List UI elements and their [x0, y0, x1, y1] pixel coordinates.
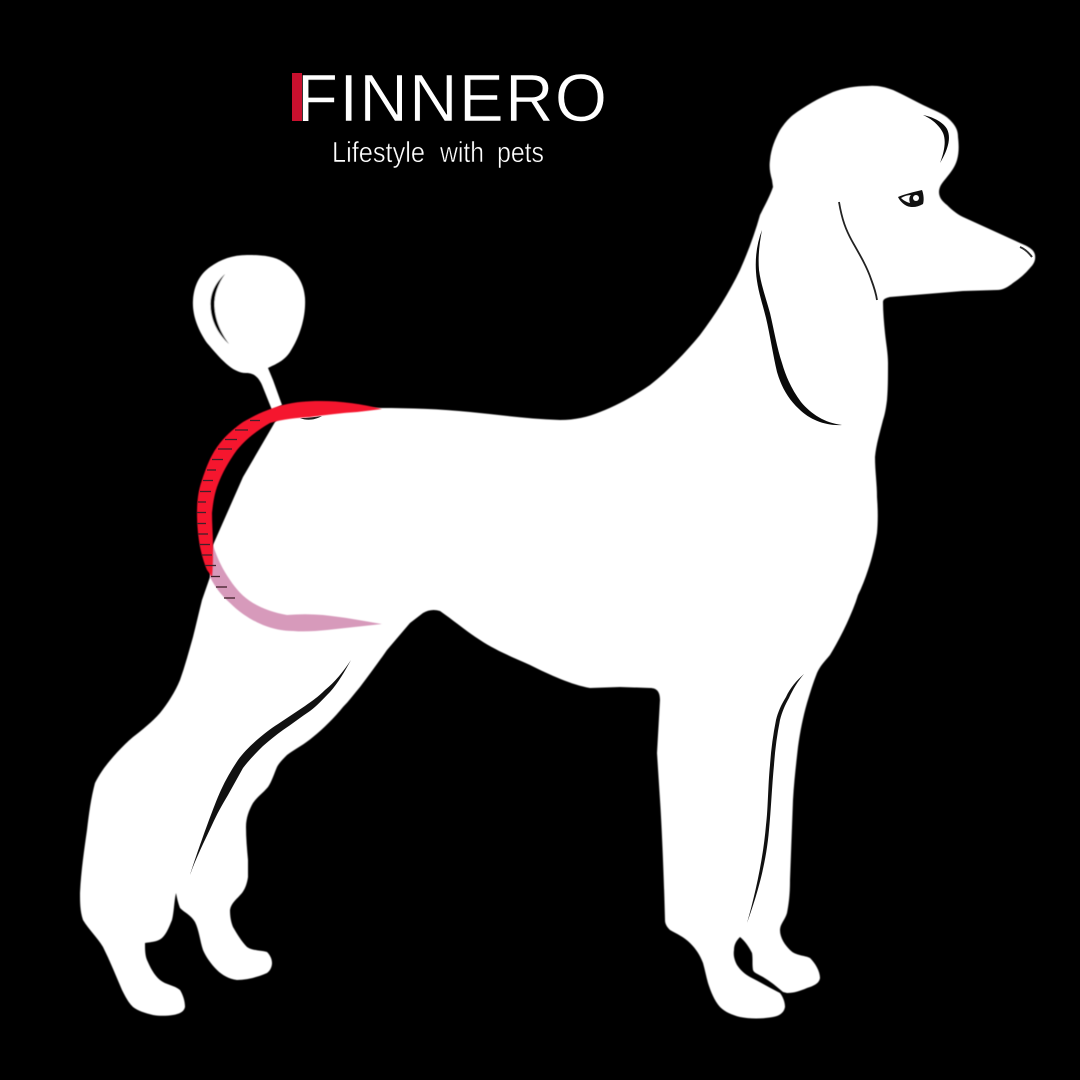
logo tagline: with — [439, 137, 484, 169]
measurement tick marks — [197, 420, 260, 598]
nose line — [1020, 247, 1032, 257]
logo tagline: pets — [497, 137, 544, 169]
tail pompom — [193, 255, 305, 410]
hind leg crease — [190, 660, 351, 875]
front leg crease — [747, 674, 804, 923]
tail pompom crease — [210, 274, 229, 344]
eye — [898, 190, 924, 207]
illustration: poodle silhouette — [80, 86, 1035, 1018]
logo wordmark: FINNERO — [297, 61, 607, 136]
logo: Finnero — [292, 61, 607, 169]
logo tagline — [332, 137, 544, 169]
logo tagline: Lifestyle — [332, 137, 425, 169]
dog body — [80, 86, 1035, 1018]
head curl line — [923, 115, 949, 163]
measurement band: red upper section — [197, 401, 382, 577]
logo red bar — [292, 73, 302, 121]
ear back line — [756, 230, 842, 425]
ear front line — [839, 202, 877, 300]
back mark — [300, 416, 322, 420]
measurement band: pink lower section — [210, 545, 382, 631]
